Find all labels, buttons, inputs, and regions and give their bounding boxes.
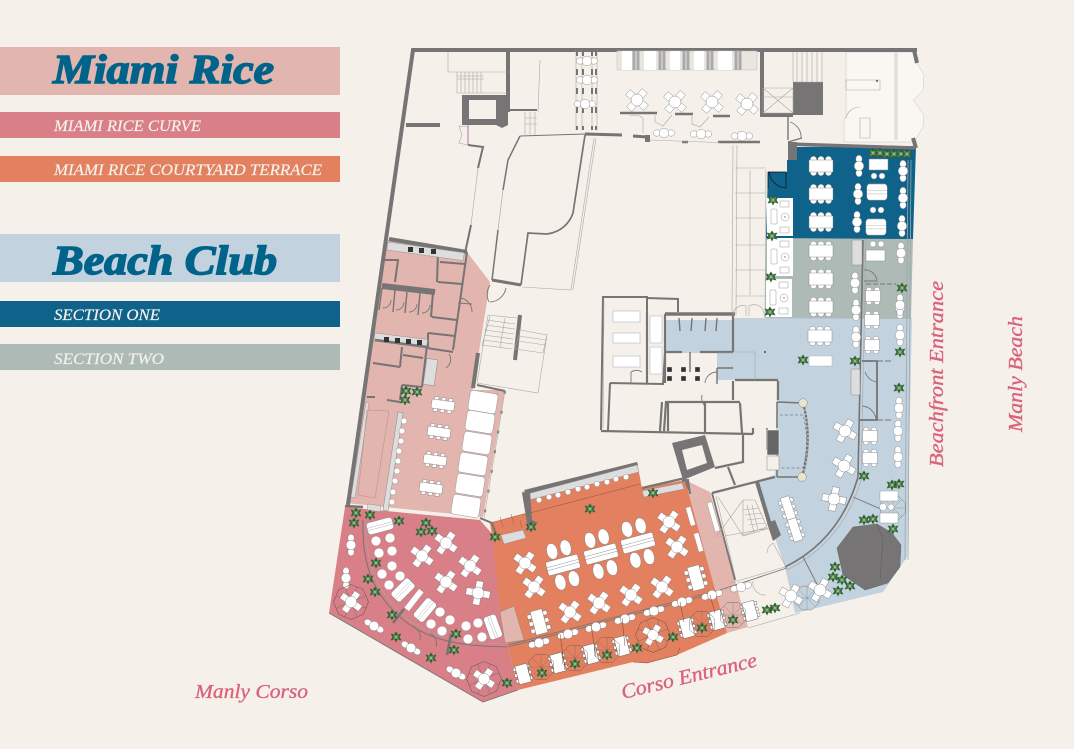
zone: Miami Rice interior bbox=[346, 240, 505, 517]
label: Corso Entrance: Corso Entrance bbox=[619, 650, 759, 704]
legend: Miami Rice heading bbox=[0, 46, 340, 95]
legend: Miami Rice Curve: MIAMI RICE CURVE bbox=[53, 118, 202, 135]
floor plan bbox=[329, 50, 924, 702]
furniture: Section One bbox=[767, 148, 912, 237]
furniture: Miami Rice bar stools and tables bbox=[389, 386, 498, 518]
zone: Courtyard Terrace bbox=[490, 462, 727, 690]
legend: Beach Club heading bbox=[0, 234, 340, 283]
walls: terrace bench and parapet bbox=[480, 462, 720, 643]
walls: perimeter and north wing bbox=[348, 50, 917, 505]
label: Beachfront Entrance: Beachfront Entrance bbox=[926, 281, 948, 467]
stage bbox=[767, 399, 808, 481]
legend: Miami Rice Curve bbox=[0, 112, 340, 138]
furniture: north wing tables bbox=[574, 56, 764, 141]
legend: Miami Rice Courtyard Terrace bbox=[0, 156, 340, 182]
legend: Section One bbox=[0, 301, 340, 327]
zone: Beach Club main bbox=[665, 318, 912, 613]
walls: Miami Rice restrooms and bar bbox=[345, 242, 505, 518]
legend: Beach Club heading: Beach Club bbox=[52, 237, 277, 283]
furniture: Miami Rice Curve bbox=[329, 508, 518, 702]
walls: stair core bbox=[477, 285, 547, 393]
zone: Miami Rice Curve bbox=[329, 507, 518, 702]
furniture: Courtyard Terrace bbox=[490, 488, 780, 685]
legend: Section One: SECTION ONE bbox=[54, 307, 161, 324]
zone: terrace walkway strip bbox=[685, 480, 748, 633]
legend: Section Two: SECTION TWO bbox=[54, 351, 164, 368]
zone: Section Two bbox=[765, 238, 913, 319]
suite room bbox=[844, 52, 924, 142]
furniture: Beach Club main floor bbox=[775, 294, 906, 612]
walls: Beach Club curved facade bbox=[508, 160, 911, 647]
walls: central service block bbox=[601, 297, 785, 595]
legend: Section Two bbox=[0, 344, 340, 370]
legend: Miami Rice Courtyard Terrace: MIAMI RICE COURTYARD TERRACE bbox=[53, 162, 323, 179]
legend: Miami Rice heading: Miami Rice bbox=[52, 46, 274, 92]
label: Manly Corso: Manly Corso bbox=[194, 681, 308, 703]
furniture: Section Two bbox=[733, 230, 908, 329]
zone: Section One bbox=[766, 146, 916, 239]
label: Manly Beach: Manly Beach bbox=[1005, 316, 1027, 433]
